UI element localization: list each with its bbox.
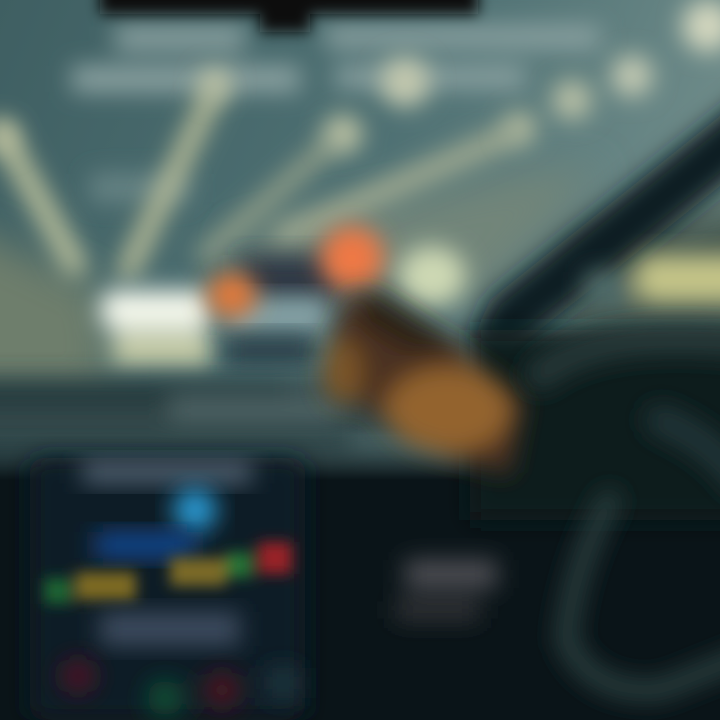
steering wheel [540,339,720,690]
dark vehicle [240,255,340,303]
dashboard top [0,378,470,450]
orange tail lights [207,226,384,318]
rear-view mirror [100,0,478,32]
pale lamp [398,246,466,306]
blue band [95,532,195,558]
windshield pillar shadow [470,60,720,345]
right cabin shadow [470,330,720,520]
hand holding phone [322,288,525,475]
ceiling lamps [0,0,720,154]
traffic ahead: headlights and tail lights [100,226,466,368]
soft cabin edge [0,435,720,480]
right side yellow light [585,255,720,308]
white headlights [100,290,212,368]
blue icon [173,488,217,532]
lower screen text blur [100,612,240,646]
screen body [30,458,305,720]
screen heading blur [82,460,252,484]
center console display [395,560,497,620]
blurred overhead text band [72,26,600,202]
dark lower cabin [0,330,720,720]
colored status row [44,542,292,604]
vehicle body [228,298,328,334]
panel: windshield background [0,0,720,480]
infotainment screen [30,458,305,720]
tunnel light streaks [0,95,510,270]
bottom icons [61,659,298,716]
solid cabin floor [0,480,720,720]
panel: tunnel walls and road [0,170,720,395]
